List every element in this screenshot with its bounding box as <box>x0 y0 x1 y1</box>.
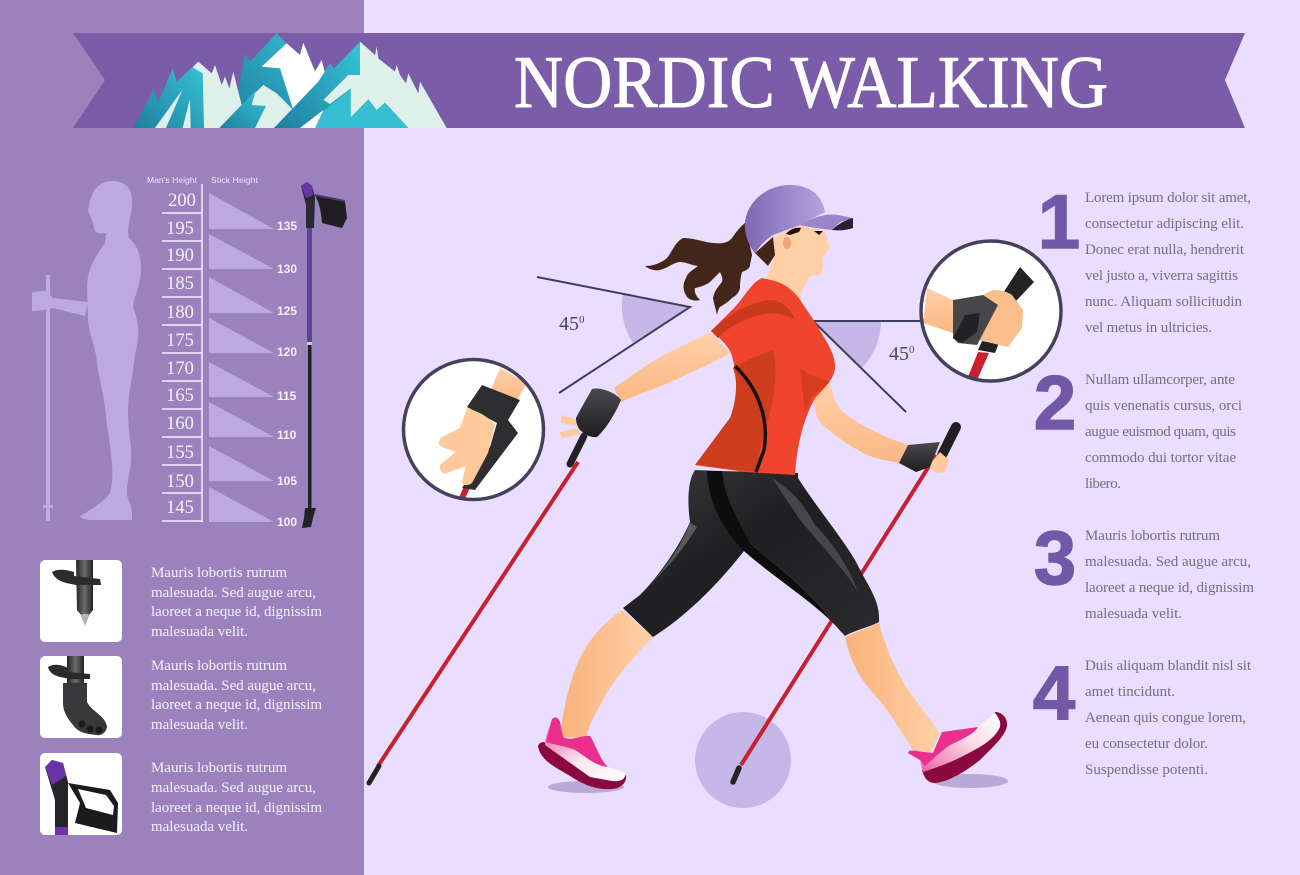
text block 4: Duis aliquam blandit nisl sit <box>1085 658 1252 674</box>
stick height values: 125 <box>277 304 297 318</box>
number 4: 4 <box>1033 651 1075 736</box>
stick height values: 120 <box>277 345 297 359</box>
forearm <box>490 368 527 403</box>
text: grip and strap: laoreet a neque id, dignissim <box>151 800 322 816</box>
text block 1 <box>1085 190 1251 336</box>
hair <box>645 223 775 315</box>
rear shoe <box>538 718 626 789</box>
text block 3: malesuada velit. <box>1085 606 1182 622</box>
rear leg <box>560 610 653 738</box>
man's height values: 180 <box>166 303 194 323</box>
stick height values: 115 <box>277 389 297 403</box>
text block 1: Donec erat nulla, hendrerit <box>1085 242 1245 258</box>
text block 2: commodo dui tortor vitae <box>1085 450 1236 466</box>
angle diagram: front arm 45 degrees <box>813 321 921 412</box>
circle outline <box>404 360 544 500</box>
text block 4: eu consectetur dolor. <box>1085 736 1208 752</box>
card: rubber foot tip <box>40 656 122 738</box>
man's height values: 185 <box>166 274 194 294</box>
red pole section <box>462 487 467 498</box>
text: rubber foot tip: laoreet a neque id, dignissim <box>151 697 322 713</box>
text: spike tip: laoreet a neque id, dignissim <box>151 604 322 620</box>
man's height values: 195 <box>166 219 194 239</box>
man's height values: 200 <box>168 191 196 211</box>
text block 2: libero. <box>1085 476 1121 492</box>
forearm <box>923 288 953 333</box>
front arm <box>814 383 908 463</box>
column header: man's height: Man's Height <box>147 175 198 185</box>
text block 2: augue euismod quam, quis <box>1085 424 1236 440</box>
rear glove and fingers <box>559 389 621 438</box>
text: rubber foot tip: Mauris lobortis rutrum <box>151 658 287 674</box>
fist <box>976 290 1023 347</box>
eye and brow <box>786 228 823 235</box>
man's height values: 155 <box>166 443 194 463</box>
text: grip and strap: malesuada velit. <box>151 819 248 835</box>
icon: nordic pole <box>301 182 347 528</box>
front leg <box>845 623 940 753</box>
open hand <box>439 408 495 485</box>
text block 1: vel metus in ultricies. <box>1085 320 1212 336</box>
neck and face <box>765 225 830 304</box>
text block 4 <box>1085 658 1252 778</box>
stick height values: 105 <box>277 474 297 488</box>
title: NORDIC WALKING <box>514 42 1108 124</box>
detail circle: rear hand <box>404 360 544 500</box>
tip accessories <box>40 560 322 835</box>
label: 45 degrees right: 45 <box>889 343 909 365</box>
detail circle: front hand <box>921 241 1061 381</box>
text: spike tip: malesuada. Sed augue arcu, <box>151 585 316 601</box>
man's height values: 190 <box>166 246 194 266</box>
text block 3: laoreet a neque id, dignissim <box>1085 580 1254 596</box>
text: spike tip: Mauris lobortis rutrum <box>151 565 287 581</box>
stick height values: 110 <box>277 428 297 442</box>
number 1: 1 <box>1038 180 1080 265</box>
stick height wedges <box>209 193 274 522</box>
text block 4: Aenean quis congue lorem, <box>1085 710 1246 726</box>
text block 1: vel justo a, viverra sagittis <box>1085 268 1238 284</box>
man's height values: 165 <box>166 386 194 406</box>
rear pole <box>369 436 584 783</box>
man's height values: 160 <box>166 414 194 434</box>
text: grip and strap: Mauris lobortis rutrum <box>151 760 287 776</box>
shirt <box>695 278 835 475</box>
text block 2: Nullam ullamcorper, ante <box>1085 372 1235 388</box>
stick height values: 135 <box>277 219 297 233</box>
shoe shadows <box>548 774 1008 793</box>
front shoe <box>908 712 1007 783</box>
label: 45 degrees right: 0 <box>909 344 915 356</box>
man's height values: 175 <box>166 331 194 351</box>
step 1 <box>1038 180 1251 336</box>
icon: man silhouette with pole <box>32 181 141 521</box>
text block 1: consectetur adipiscing elit. <box>1085 216 1244 232</box>
card: grip and strap <box>40 753 122 835</box>
grip <box>978 267 1034 353</box>
stick height values: 130 <box>277 262 297 276</box>
man's height values: 145 <box>166 498 194 518</box>
scale axis and ticks <box>162 184 202 522</box>
stick height values <box>277 219 297 529</box>
red pole section <box>968 352 989 378</box>
text: rubber foot tip <box>151 658 322 733</box>
text block 1: nunc. Aliquam sollicitudin <box>1085 294 1242 310</box>
step 4 <box>1033 651 1252 778</box>
man's height values <box>166 191 196 518</box>
text: rubber foot tip: malesuada velit. <box>151 717 248 733</box>
banner ribbon <box>73 33 1245 128</box>
text block 2: quis venenatis cursus, orci <box>1085 398 1242 414</box>
card: spike tip <box>40 560 122 642</box>
column header: stick height: Stick Height <box>211 175 259 185</box>
stick height values: 100 <box>277 515 297 529</box>
text block 1: Lorem ipsum dolor sit amet, <box>1085 190 1251 206</box>
text block 3: malesuada. Sed augue arcu, <box>1085 554 1251 570</box>
title banner <box>73 33 1245 128</box>
step 3 <box>1034 516 1254 622</box>
cap <box>745 185 853 253</box>
tights <box>623 470 879 637</box>
text: spike tip: malesuada velit. <box>151 624 248 640</box>
glove palm patch <box>953 313 980 343</box>
text: spike tip <box>151 565 322 640</box>
text block 3 <box>1085 528 1254 622</box>
label: 45 degrees left: 0 <box>579 314 585 326</box>
circle outline <box>921 241 1061 381</box>
rear arm <box>614 332 730 402</box>
glove and grip <box>462 385 520 490</box>
ear <box>783 237 791 249</box>
text block 4: Suspendisse potenti. <box>1085 762 1208 778</box>
number 2: 2 <box>1034 361 1076 446</box>
ground accent circle <box>695 712 791 808</box>
angle diagram: rear arm 45 degrees <box>537 277 690 393</box>
panel: left sidebar <box>0 0 364 875</box>
step 2 <box>1034 361 1242 492</box>
text: rubber foot tip: malesuada. Sed augue arcu, <box>151 678 316 694</box>
label: 45 degrees left: 45 <box>559 313 579 335</box>
man's height values: 150 <box>166 472 194 492</box>
text block 4: amet tincidunt. <box>1085 684 1175 700</box>
number 3: 3 <box>1034 516 1076 601</box>
man's height values: 170 <box>166 359 194 379</box>
icon: mountains <box>133 33 447 128</box>
text: grip and strap: malesuada. Sed augue arcu, <box>151 780 316 796</box>
text: grip and strap <box>151 760 322 835</box>
text block 2 <box>1085 372 1242 492</box>
front pole <box>733 427 956 782</box>
height chart <box>32 175 347 529</box>
text block 3: Mauris lobortis rutrum <box>1085 528 1220 544</box>
glove <box>953 295 998 345</box>
front glove and fingers <box>899 442 949 473</box>
figure: woman nordic walking <box>369 185 1008 793</box>
